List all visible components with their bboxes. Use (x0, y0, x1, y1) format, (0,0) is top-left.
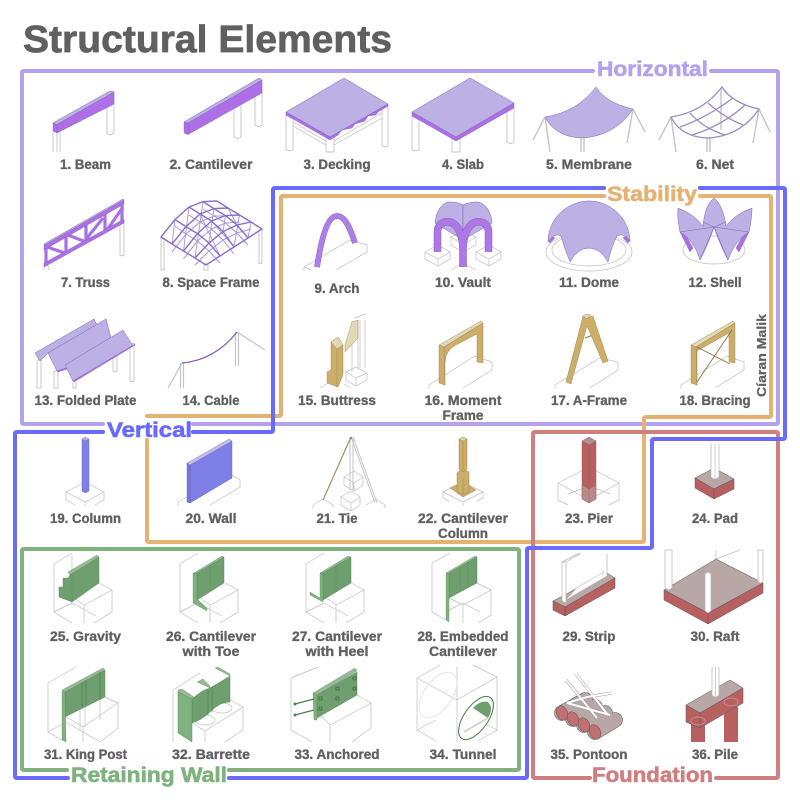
icon: strip foundation (553, 553, 615, 616)
label: 16. Moment (424, 392, 502, 408)
icon: buttress (320, 314, 367, 388)
label: 23. Pier (565, 510, 614, 526)
icon: cantilever wall with toe (180, 553, 238, 623)
icon: pontoon (554, 674, 615, 741)
icon: cable (168, 332, 265, 388)
label: 4. Slab (442, 156, 484, 172)
element: 31 King Post (44, 667, 127, 762)
label: 17. A-Frame (551, 392, 627, 408)
element: 16 Moment Frame (424, 321, 502, 423)
label: 24. Pad (692, 510, 738, 526)
element: 19 Column (50, 437, 121, 526)
label: 9. Arch (314, 280, 360, 296)
label (424, 392, 502, 423)
icon: pad (695, 443, 734, 499)
title: Structural Elements (23, 19, 392, 61)
icon: decking (286, 78, 388, 152)
icon: membrane (533, 87, 645, 152)
icon: space frame (161, 201, 262, 270)
label: 6. Net (696, 156, 734, 172)
icon: barrette wall (173, 667, 243, 742)
label: 35. Pontoon (550, 746, 628, 762)
icon: truss (44, 199, 124, 270)
icon: gravity wall (54, 553, 112, 623)
element: 9 Arch (304, 216, 367, 296)
icon: moment frame (429, 321, 492, 389)
label: 30. Raft (690, 628, 740, 644)
label (418, 628, 508, 659)
icon: cantilever wall with heel (306, 553, 364, 623)
label: with Heel (304, 643, 368, 659)
label: 10. Vault (435, 274, 491, 290)
element: 14 Cable (168, 332, 265, 408)
icon: pile foundation (686, 667, 743, 742)
label (292, 628, 383, 659)
label: 26. Cantilever (166, 628, 257, 644)
heading: Vertical: Vertical (107, 419, 192, 442)
panel: Foundation border (533, 432, 778, 787)
label: 11. Dome (559, 274, 619, 290)
label: 21. Tie (316, 510, 358, 526)
icon: tie (313, 437, 385, 511)
element: 13 Folded Plate (34, 319, 137, 408)
element: 10 Vault (425, 202, 501, 290)
label: 18. Bracing (680, 392, 750, 408)
icon: wall (178, 439, 240, 506)
label: 29. Strip (562, 628, 616, 644)
label: 31. King Post (44, 746, 127, 762)
label: 5. Membrane (546, 156, 632, 172)
heading: Foundation: Foundation (592, 764, 713, 787)
element: 26 Cantilever with Toe (166, 553, 257, 659)
icon: net (659, 87, 770, 152)
label: 28. Embedded (418, 628, 508, 644)
icon: tunnel (412, 665, 500, 745)
label: 3. Decking (304, 156, 370, 172)
label: Frame (442, 407, 484, 423)
icon: column (66, 437, 104, 506)
label: 22. Cantilever (418, 510, 509, 526)
icon: bracing (681, 321, 744, 389)
icon: pier (558, 437, 619, 505)
element: 24 Pad (692, 443, 738, 526)
label: 8. Space Frame (162, 274, 260, 290)
icon: beam (53, 91, 114, 152)
icon: dome (546, 201, 632, 271)
element: 33 Anchored (291, 667, 380, 762)
element: 30 Raft (664, 550, 763, 644)
element: 35 Pontoon (550, 674, 628, 762)
label: with Toe (181, 643, 240, 659)
label: 36. Pile (692, 746, 738, 762)
element: 36 Pile (686, 667, 743, 762)
icon: vault (425, 202, 501, 270)
icon: king post wall (48, 667, 118, 742)
label (418, 510, 509, 541)
label: 2. Cantilever (170, 156, 253, 172)
element: 2 Cantilever (170, 78, 262, 172)
element: 6 Net (659, 87, 770, 172)
heading: Stability: Stability (607, 183, 697, 206)
icon: raft foundation (664, 550, 763, 624)
element: 20 Wall (178, 439, 240, 526)
element: 34 Tunnel (412, 665, 500, 762)
icon: cantilever column (443, 437, 483, 506)
icon: a-frame (555, 314, 618, 389)
element: 11 Dome (546, 201, 632, 290)
element: 28 Embedded Cantilever (418, 553, 508, 659)
label: 14. Cable (182, 392, 240, 408)
element: 22 Cantilever Column (418, 437, 509, 541)
heading: Horizontal: Horizontal (597, 58, 708, 81)
label: 13. Folded Plate (34, 392, 137, 408)
element: 4 Slab (412, 78, 514, 172)
label: 34. Tunnel (430, 746, 496, 762)
icon: anchored wall (291, 667, 371, 742)
icon: embedded cantilever (432, 553, 491, 623)
element: 3 Decking (286, 78, 388, 172)
icon: folded plate (35, 319, 135, 388)
label (166, 628, 257, 659)
label: 20. Wall (186, 510, 236, 526)
element: 27 Cantilever with Heel (292, 553, 383, 659)
label: Column (438, 525, 488, 541)
element: 1 Beam (53, 91, 114, 172)
label: 27. Cantilever (292, 628, 383, 644)
element: 7 Truss (44, 199, 124, 290)
icon: shell (678, 198, 752, 264)
element: 29 Strip (553, 553, 616, 644)
label: 1. Beam (60, 156, 111, 172)
panel: Retaining Wall border (22, 549, 519, 787)
icon: arch (304, 216, 367, 271)
credit: Cíaran Malik (755, 314, 769, 397)
element: 32 Barrette (172, 667, 250, 762)
element: 5 Membrane (533, 87, 645, 172)
element: 21 Tie (313, 437, 385, 526)
label: 19. Column (50, 510, 121, 526)
element: 23 Pier (558, 437, 619, 526)
element: 25 Gravity (50, 553, 121, 644)
element: 8 Space Frame (161, 201, 262, 290)
label: 25. Gravity (50, 628, 121, 644)
label: Cantilever (429, 643, 498, 659)
element: 17 A-Frame (551, 314, 627, 408)
label: 12. Shell (688, 274, 742, 290)
icon: slab (412, 78, 514, 152)
element: 18 Bracing (680, 321, 750, 408)
label: 33. Anchored (294, 746, 380, 762)
element: 12 Shell (678, 198, 752, 290)
label: 15. Buttress (298, 392, 376, 408)
label: 32. Barrette (172, 746, 250, 762)
label: 7. Truss (61, 274, 110, 290)
icon: cantilever (184, 78, 262, 139)
element: 15 Buttress (298, 314, 376, 408)
heading: Retaining Wall: Retaining Wall (71, 764, 227, 787)
